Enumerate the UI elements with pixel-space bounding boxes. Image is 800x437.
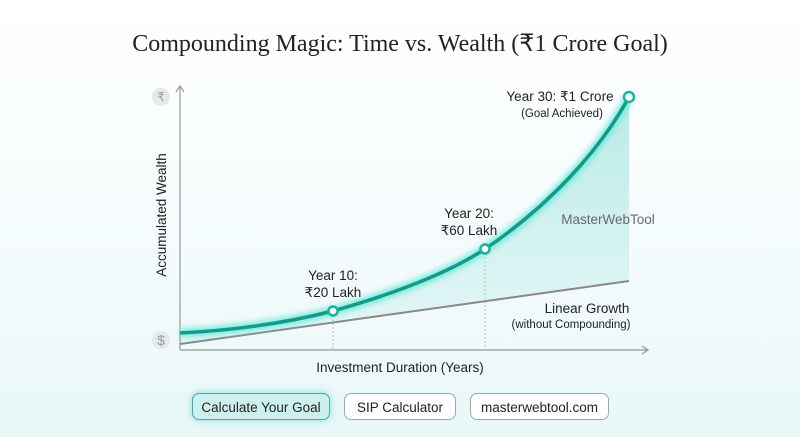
button: site (470, 393, 609, 420)
labels: Linear Growth (545, 301, 629, 316)
button: sip (344, 393, 456, 420)
linear line (180, 281, 629, 344)
button: calculate (192, 393, 330, 420)
labels: MasterWebTool (561, 212, 655, 227)
labels: ₹20 Lakh (305, 285, 361, 300)
labels: ₹60 Lakh (441, 223, 497, 238)
button: site: masterwebtool.com (481, 400, 598, 415)
labels: (without Compounding) (512, 319, 631, 331)
title: Compounding Magic: Time vs. Wealth (₹1 Crore Goal) (132, 31, 668, 57)
labels: Investment Duration (Years) (316, 360, 484, 375)
labels: Year 30: ₹1 Crore (506, 89, 614, 104)
axis icons: $ (157, 332, 165, 348)
axis icons: ₹ (157, 90, 165, 104)
fill area (180, 97, 629, 344)
axis icons (152, 88, 170, 349)
points (328, 92, 634, 316)
labels: Accumulated Wealth (154, 153, 169, 277)
labels: (Goal Achieved) (521, 108, 603, 120)
labels: Year 10: (308, 268, 358, 283)
compound curve (180, 97, 629, 333)
button: calculate: Calculate Your Goal (201, 400, 321, 415)
button: sip: SIP Calculator (357, 400, 443, 415)
labels: Year 20: (444, 206, 494, 221)
axes (176, 86, 648, 354)
labels (154, 89, 655, 375)
guide lines (333, 249, 485, 350)
